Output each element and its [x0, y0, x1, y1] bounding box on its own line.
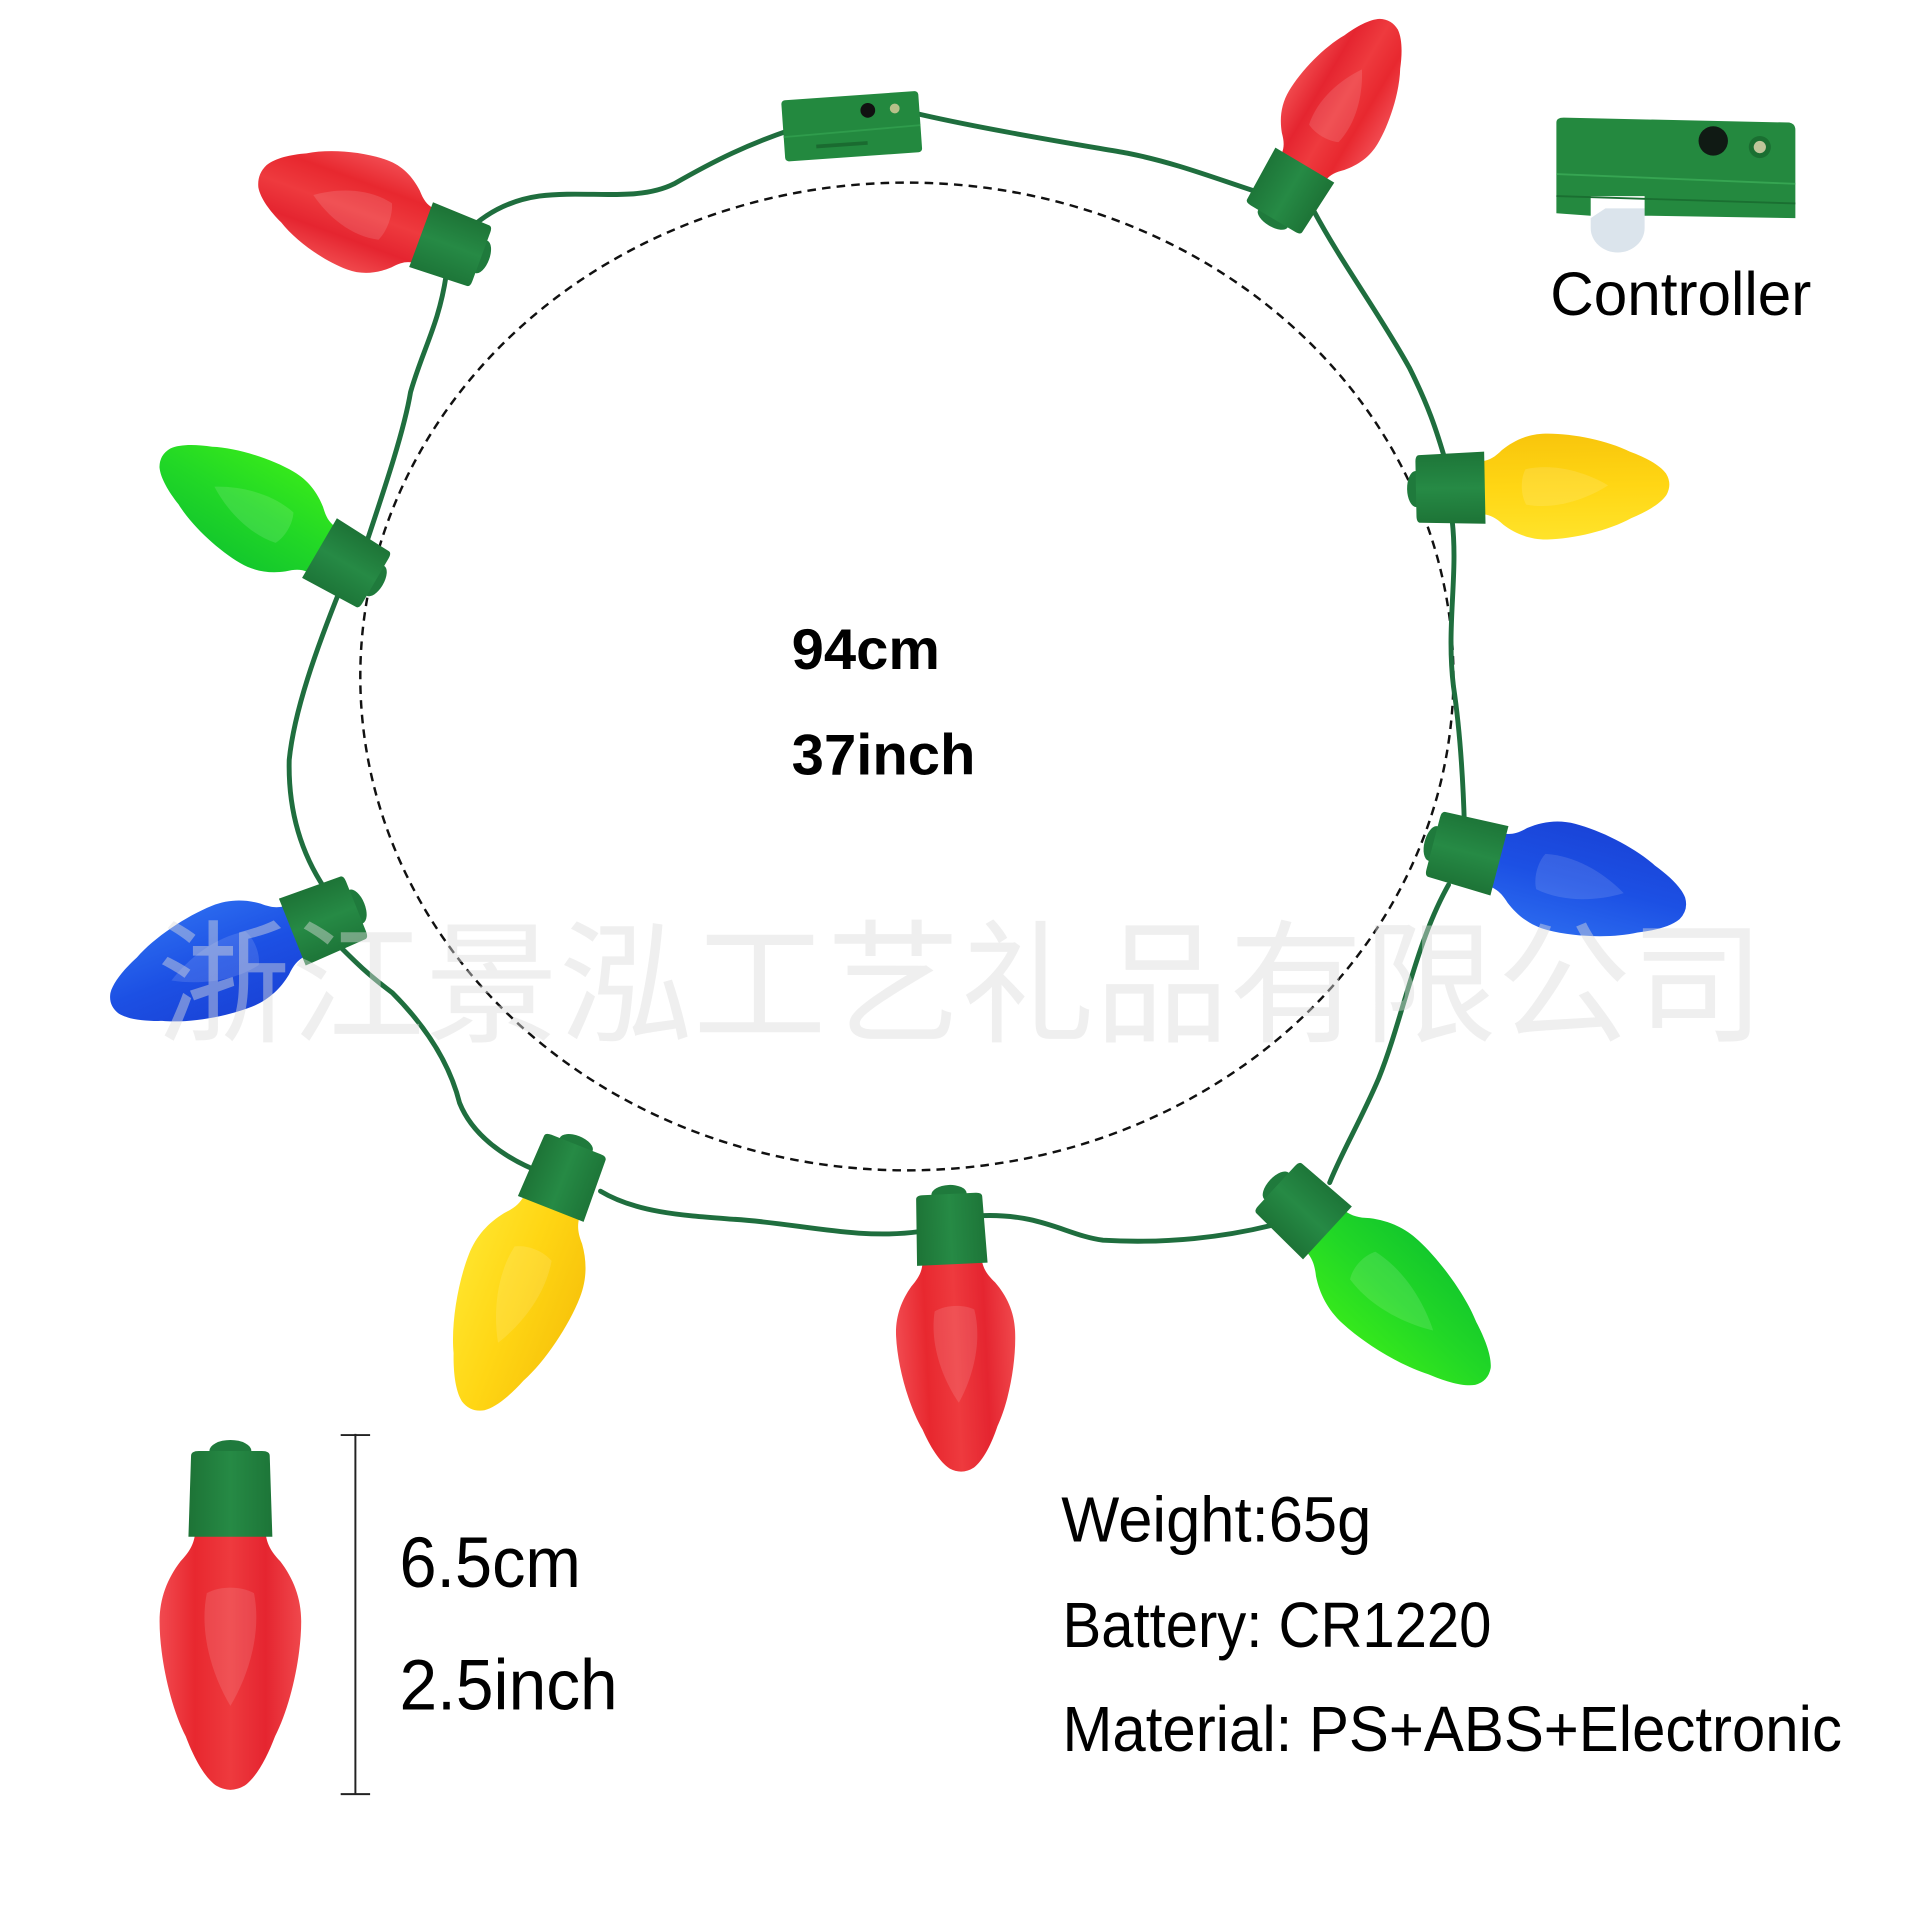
bulb: blue left: [91, 853, 384, 1055]
bulb: yellow right: [1406, 431, 1670, 542]
controller on necklace: [781, 91, 922, 162]
spec: battery: Battery: CR1220: [1063, 1589, 1491, 1661]
label: Controller: Controller: [1550, 260, 1811, 328]
bulb: red top right: [1225, 0, 1435, 252]
label: 37inch: 37inch: [792, 724, 975, 788]
dashed circumference ellipse: [360, 183, 1453, 1170]
bulb: blue right: [1411, 788, 1699, 962]
bulb: red top left: [240, 121, 509, 314]
bulb: yellow bottom left: [416, 1114, 635, 1431]
bulb: red bottom: [889, 1182, 1022, 1474]
twisted green wire: [289, 113, 1464, 1241]
label: 94cm: 94cm: [792, 618, 940, 682]
controller detail: [1556, 118, 1795, 252]
bulb: green bottom right: [1232, 1139, 1524, 1420]
bulb: green left: [136, 410, 409, 631]
dimension ruler: [341, 1434, 370, 1794]
label: 2.5inch: 2.5inch: [400, 1647, 618, 1726]
watermark: 浙江景泓工艺礼品有限公司: [157, 878, 1765, 1071]
large single red bulb: [160, 1440, 301, 1790]
spec: material: Material: PS+ABS+Electronic: [1063, 1693, 1842, 1765]
spec: weight: Weight:65g: [1061, 1484, 1371, 1556]
label: 6.5cm: 6.5cm: [400, 1524, 581, 1603]
